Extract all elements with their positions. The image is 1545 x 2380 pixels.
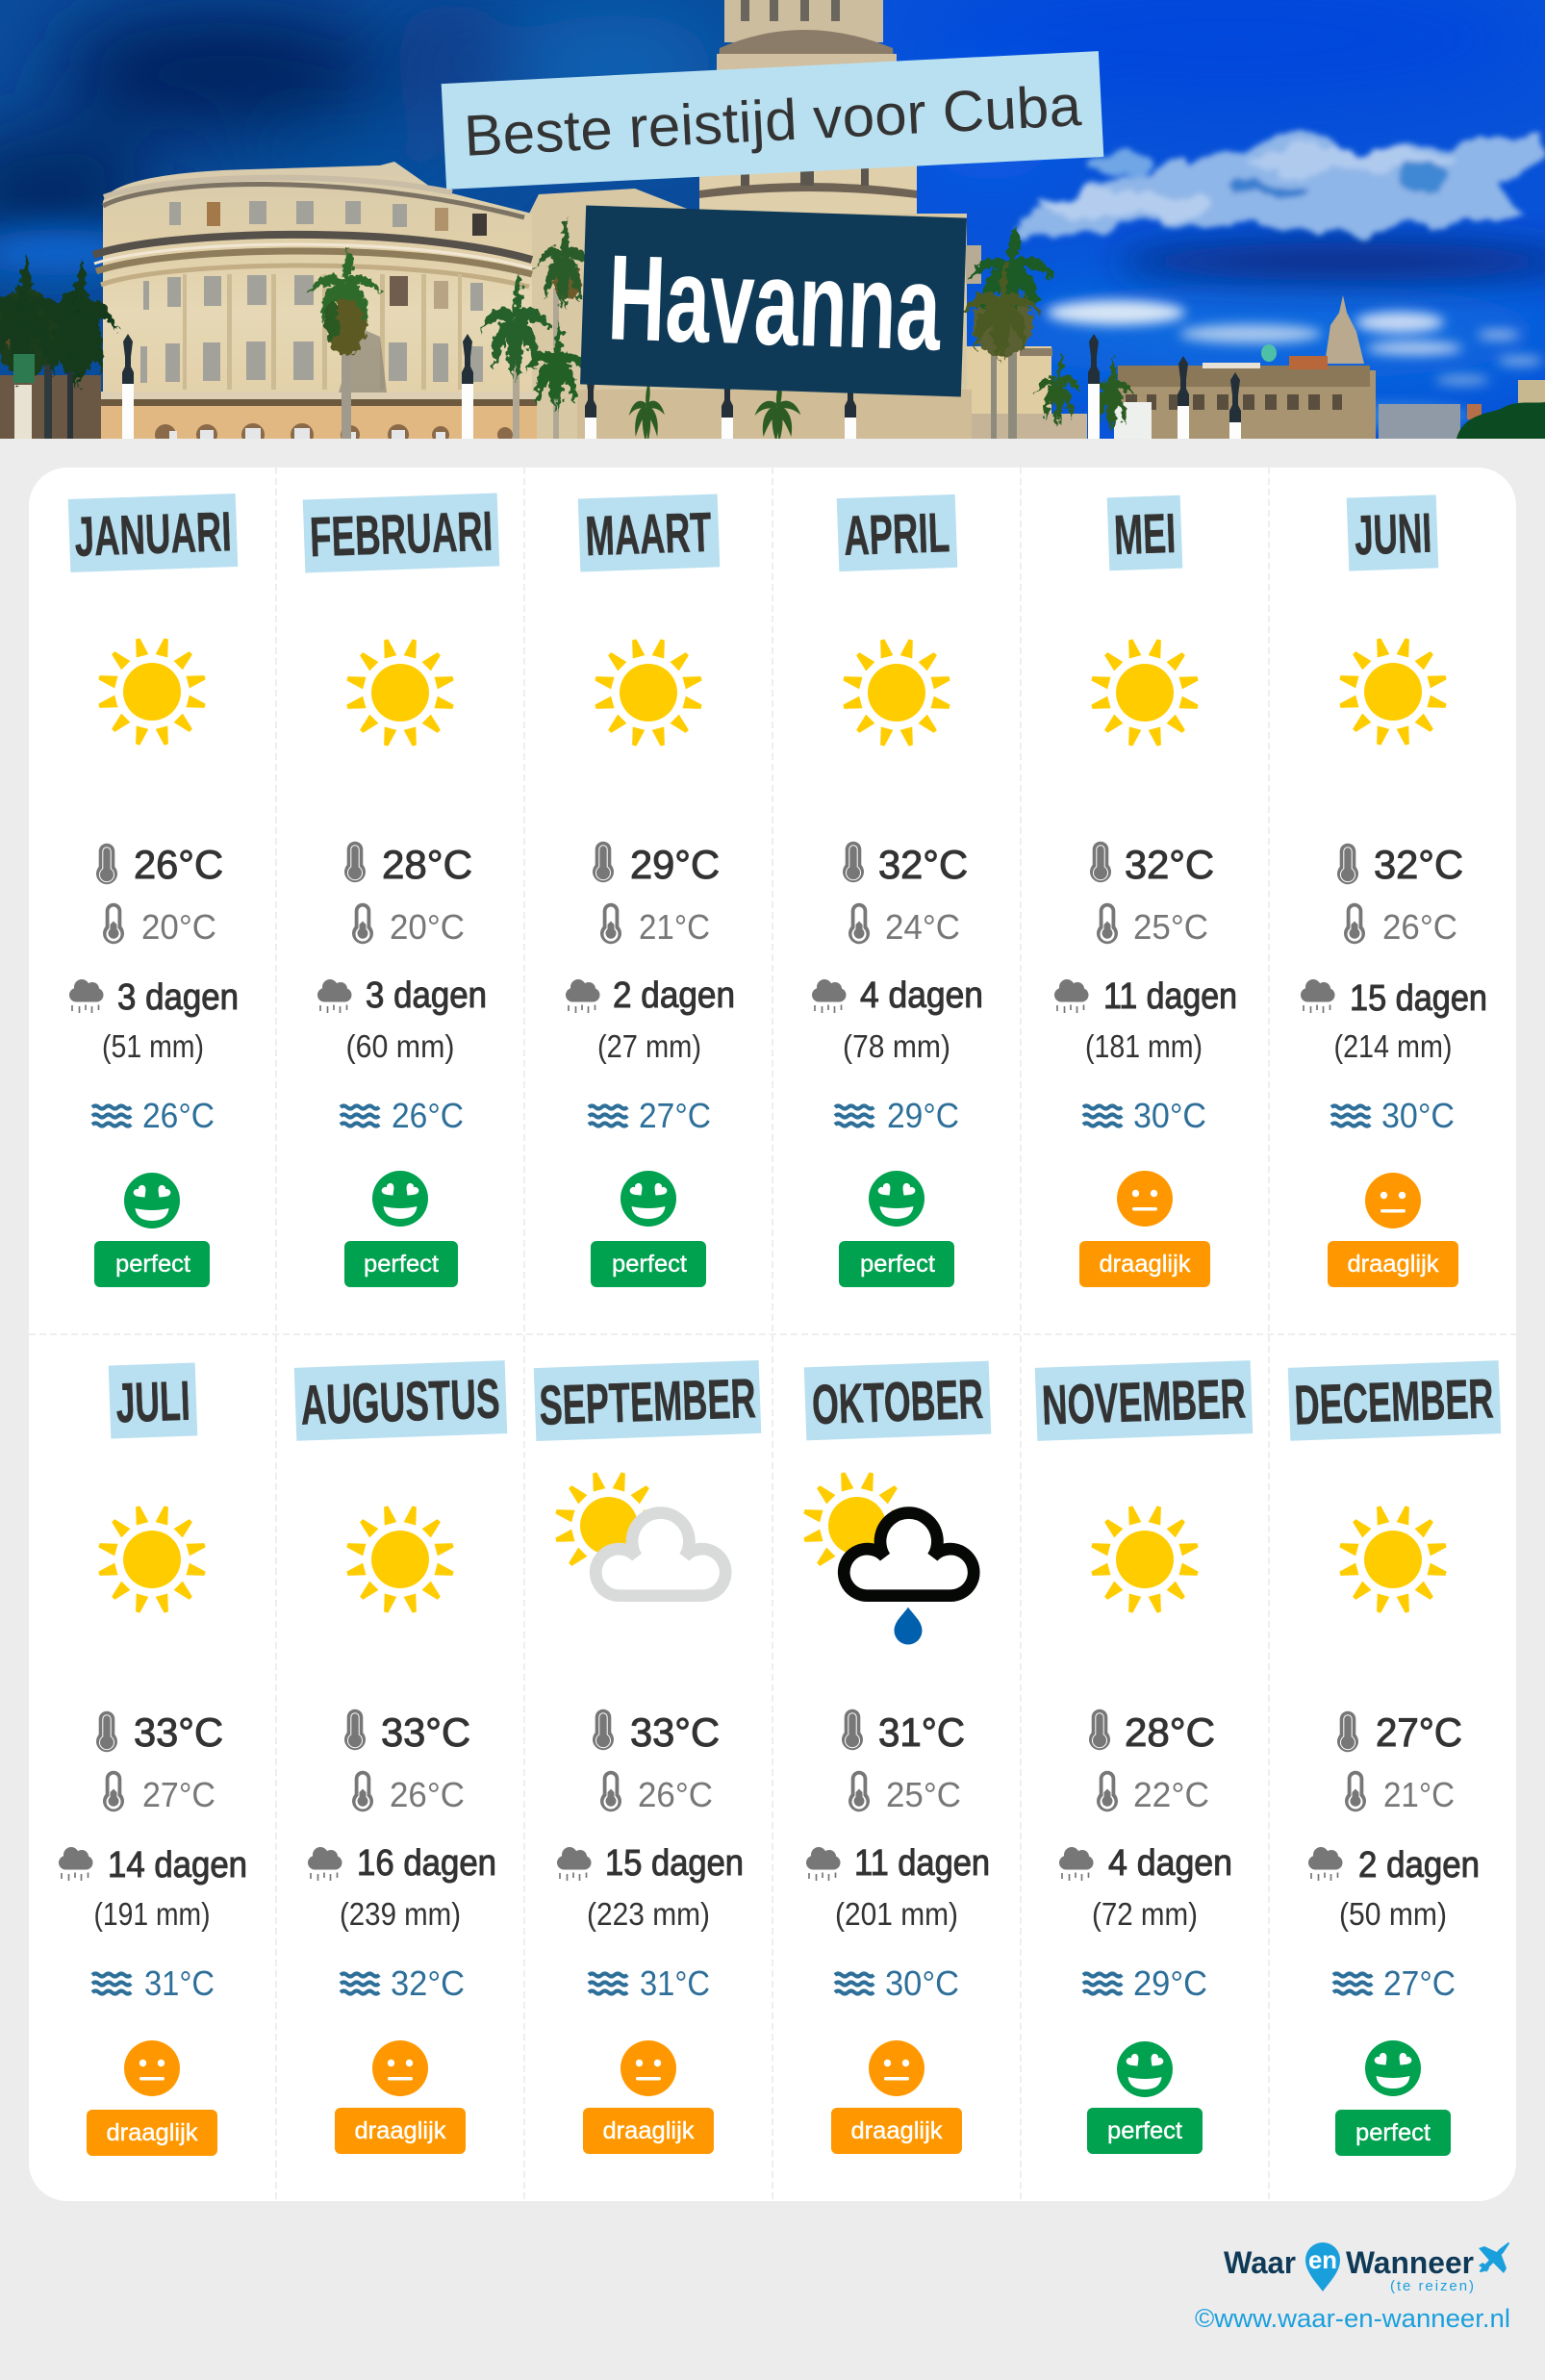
min temperature [1097,903,1208,947]
month label: MAART [584,501,713,568]
rating badge: draaglijk [1079,1241,1210,1287]
cell: januari [68,494,239,1287]
sea temperature [341,1963,465,2003]
title banner: Beste reistijd voor Cuba: Beste reistijd voor Cuba [463,73,1083,168]
weather icon: sun [345,638,455,747]
rating badge: perfect: perfect [612,1251,687,1278]
rain days: 2 dagen [613,975,735,1016]
rain days: 4 dagen [1108,1843,1232,1884]
lamp posts [122,334,134,442]
min temperature: 20°C [141,907,216,947]
sea temperature [589,1096,711,1135]
sea temperature: 31°C [144,1963,215,2003]
min temperature: 21°C [1383,1775,1455,1814]
rating badge: draaglijk: draaglijk [602,2117,695,2144]
rating badge: draaglijk: draaglijk [1099,1251,1191,1278]
rating badge: perfect: perfect [364,1251,439,1278]
min temperature [352,903,465,947]
min temperature [848,1771,961,1814]
icon: map pin with en [1305,2242,1340,2291]
rain days: 11 dagen [1103,976,1237,1017]
rain days [812,975,983,1016]
month label: JANUARI [73,500,233,569]
rating badge: draaglijk [831,2108,962,2154]
max temperature [1337,1709,1462,1755]
rating badge: perfect: perfect [115,1251,190,1278]
cell: mei [1054,495,1237,1287]
rating icon: happy [1117,2041,1173,2097]
min temperature [848,903,960,947]
rating badge: draaglijk [87,2110,217,2156]
rating icon: happy [1365,2040,1421,2096]
sea temperature [835,1096,959,1135]
weather icon: sun behind black cloud with raindrop [802,1471,974,1645]
cell: december [1288,1360,1501,2156]
sea temperature: 30°C [1133,1096,1206,1135]
sea temperature [589,1963,710,2003]
sea temperature [92,1963,215,2003]
rating badge: draaglijk: draaglijk [106,2119,198,2146]
rating icon: neutral [372,2040,428,2096]
sea temperature: 30°C [885,1963,959,2003]
copyright url: ©www.waar-en-wanneer.nl [1195,2304,1510,2333]
sea temperature: 30°C [1381,1096,1455,1135]
rating icon: happy [372,1171,428,1227]
month label: SEPTEMBER [538,1367,757,1437]
month label [534,1360,761,1441]
min temperature: 26°C [390,1775,465,1814]
rating icon: neutral [1117,1171,1173,1227]
rating icon: happy [124,1173,180,1228]
rating icon: neutral [1365,1173,1421,1228]
rainfall amount: (72 mm) [1092,1896,1198,1932]
max temperature [593,1709,720,1755]
max temperature [842,1709,965,1755]
min temperature: 27°C [142,1775,215,1814]
max temperature: 32°C [1125,842,1214,887]
max temperature: 33°C [134,1709,223,1755]
rain days [557,1843,744,1884]
sea temperature [92,1096,215,1135]
rating badge: draaglijk [583,2108,714,2154]
month label: JULI [114,1370,191,1434]
panel: monthly climate card [29,468,1516,2201]
min temperature [1097,1771,1209,1814]
left side palms [0,375,101,439]
cell: juni [1301,494,1487,1287]
cell: april [812,494,983,1287]
month label [1107,495,1182,570]
rating badge: perfect: perfect [1107,2117,1182,2144]
max temperature: 33°C [381,1709,470,1755]
weather icon: sun [1338,1505,1448,1614]
sea temperature: 26°C [392,1096,464,1135]
max temperature: 29°C [630,842,720,887]
rating icon: neutral [124,2040,180,2096]
weather icon: sun behind grey cloud [554,1471,725,1596]
icon: map pin with en: en [1308,2245,1337,2274]
sea temperature [1083,1963,1207,2003]
logo: Waar en Wanneer: Wanneer [1346,2245,1474,2280]
max temperature: 32°C [878,842,968,887]
rain days: 3 dagen [117,977,239,1018]
sea temperature: 29°C [887,1096,959,1135]
rating badge: draaglijk: draaglijk [850,2117,943,2144]
rating badge: draaglijk [1328,1241,1458,1287]
max temperature: 26°C [134,842,223,887]
sea temperature [1331,1096,1455,1135]
rating badge: perfect: perfect [1355,2119,1431,2146]
sea temperature: 27°C [639,1096,711,1135]
month label [303,493,499,573]
weather icon: sun [594,638,703,747]
max temperature: 33°C [630,1709,720,1755]
cell: september [534,1360,761,2154]
rating badge: perfect [1087,2108,1203,2154]
rain days [69,977,239,1018]
weather icon: sun [1338,637,1448,747]
rating badge: draaglijk: draaglijk [354,2117,446,2144]
sea temperature: 27°C [1383,1963,1456,2003]
month label [1035,1360,1253,1441]
rainfall amount: (27 mm) [597,1028,701,1064]
min temperature: 24°C [885,907,960,947]
min temperature [103,903,216,947]
rating badge: draaglijk [335,2108,466,2154]
sea temperature [341,1096,464,1135]
month label: AUGUSTUS [299,1367,501,1437]
shadow of palm on wall [339,327,387,392]
city banner: Havanna: Havanna [606,229,944,376]
month label [578,494,720,571]
rain days [566,975,735,1016]
rain days [1054,976,1237,1017]
sea temperature: 32°C [391,1963,465,2003]
month label [294,1360,507,1441]
cell: maart [566,494,735,1287]
rain days: 14 dagen [108,1845,247,1886]
lower windows [140,342,483,383]
rainfall amount: (51 mm) [102,1028,204,1064]
weather icon: sun [345,1505,455,1614]
rain days: 15 dagen [605,1843,744,1884]
cell: juli [59,1362,247,2156]
upper windows [169,201,407,227]
cell: augustus [294,1360,507,2154]
header photo: Capitolio Havana [0,0,1545,480]
icon: airplane [1479,2243,1508,2273]
rain days [59,1845,247,1886]
cell: februari [303,493,499,1287]
min temperature: 22°C [1133,1775,1209,1814]
month label [109,1362,197,1439]
month label: MEI [1113,502,1177,567]
rating badge: perfect [1335,2110,1451,2156]
rain days [308,1843,496,1884]
rating badge: perfect: perfect [860,1251,935,1278]
right palm [1008,346,1017,439]
capitol building [93,162,1087,446]
sea temperature [1333,1963,1456,2003]
rating badge: perfect [94,1241,210,1287]
arches [155,423,513,439]
max temperature: 31°C [878,1709,965,1755]
rainfall amount: (60 mm) [346,1028,454,1064]
rain days: 16 dagen [357,1843,496,1884]
min temperature [103,1771,215,1814]
weather icon: sun [1090,1505,1200,1614]
min temperature: 25°C [886,1775,961,1814]
rainfall amount: (223 mm) [587,1896,710,1932]
sea temperature [835,1963,959,2003]
max temperature: 28°C [1125,1709,1215,1755]
title banner: Beste reistijd voor Cuba [442,51,1103,190]
rain days: 3 dagen [366,975,487,1016]
rain days [1301,978,1487,1019]
month label: FEBRUARI [309,500,494,569]
rain days [1308,1845,1480,1886]
sea temperature: 29°C [1133,1963,1207,2003]
middle windows [143,275,483,311]
month label [1347,494,1438,571]
sea temperature: 26°C [142,1096,215,1135]
logo: Waar en Wanneer: Waar [1224,2245,1296,2280]
rainfall amount: (181 mm) [1085,1028,1203,1064]
month label [837,494,957,571]
cell: oktober [802,1361,991,2154]
min temperature [1345,1771,1455,1814]
weather icon: sun [842,638,951,747]
weather icon: sun [97,1505,207,1614]
min temperature: 21°C [639,907,710,947]
rainfall amount: (78 mm) [843,1028,950,1064]
palms on the building [342,346,351,439]
month label [804,1361,991,1440]
max temperature: 27°C [1376,1709,1462,1755]
month label: APRIL [843,501,950,568]
right wing [967,346,1051,418]
dome [699,0,917,216]
month label: JUNI [1354,502,1432,567]
month label: NOVEMBER [1041,1367,1247,1437]
rating badge: perfect [344,1241,458,1287]
rainfall amount: (239 mm) [340,1896,461,1932]
max temperature: 32°C [1374,842,1463,887]
logo: Waar en Wanneer: (te reizen) [1390,2278,1474,2294]
weather icon: sun [1090,638,1200,747]
sea temperature: 31°C [640,1963,710,2003]
sea temperature [1083,1096,1206,1135]
rainfall amount: (201 mm) [835,1896,958,1932]
min temperature: 26°C [1382,907,1457,947]
rain days: 2 dagen [1358,1845,1480,1886]
min temperature [600,903,710,947]
rain days: 11 dagen [854,1843,990,1884]
rating icon: happy [869,1171,924,1227]
rain days [317,975,487,1016]
cell: november [1035,1360,1253,2154]
month label: OKTOBER [811,1368,984,1436]
rating icon: neutral [621,2040,676,2096]
min temperature: 26°C [638,1775,713,1814]
rain days [806,1843,990,1884]
rating icon: neutral [869,2040,924,2096]
rating badge: perfect [591,1241,706,1287]
weather icon: sun [97,637,207,747]
max temperature: 28°C [382,842,472,887]
rating badge: perfect [839,1241,954,1287]
logo: Waar en Wanneer [1224,2242,1508,2294]
rain days: 15 dagen [1350,978,1487,1019]
min temperature [1344,903,1457,947]
rainfall amount: (214 mm) [1333,1028,1453,1064]
min temperature: 25°C [1133,907,1208,947]
min temperature [352,1771,465,1814]
rainfall amount: (50 mm) [1339,1896,1447,1932]
city banner: Havanna [580,205,967,397]
distant theatre [1114,295,1545,439]
min temperature [600,1771,713,1814]
month label [68,494,238,572]
rain days: 4 dagen [860,975,983,1016]
min temperature: 20°C [390,907,465,947]
max temperature [593,842,720,887]
rain days [1059,1843,1232,1884]
rating icon: happy [621,1171,676,1227]
rating badge: draaglijk: draaglijk [1347,1251,1439,1278]
rainfall amount: (191 mm) [94,1896,210,1932]
